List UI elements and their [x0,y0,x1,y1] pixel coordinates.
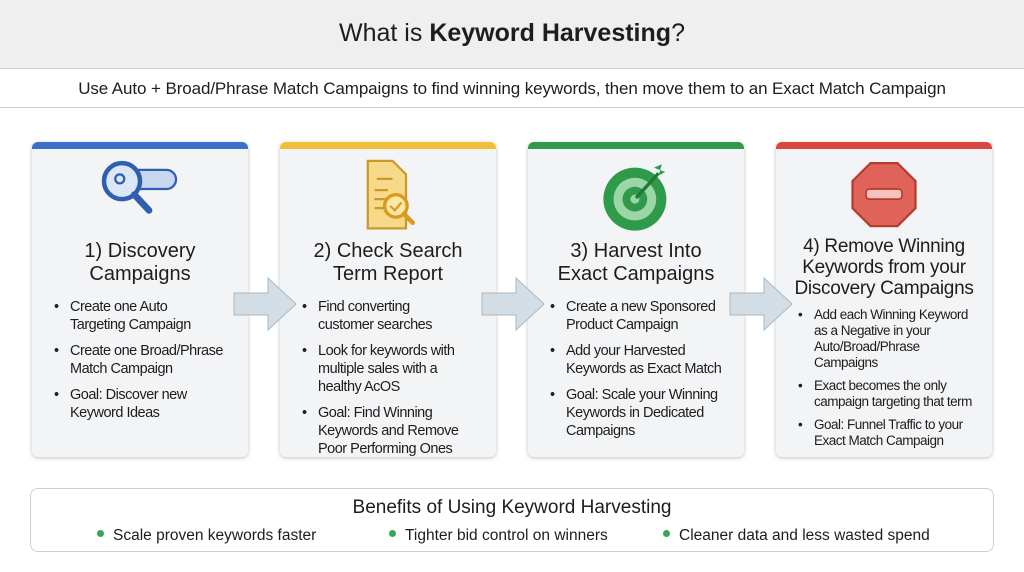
panel: discovery campaigns [32,142,248,457]
title: What is Keyword Harvesting? [339,19,685,47]
heading: Exact Campaigns [558,263,714,285]
bullets: Look for keywords with multiple sales with a healthy AcOS [318,343,454,395]
bullets: Add your Harvested Keywords as Exact Match [566,343,721,377]
arrow 1 [234,277,296,331]
heading [314,240,462,285]
heading [558,240,714,285]
heading: 3) Harvest Into [570,240,702,262]
subtitle [0,69,1024,108]
panel: search term report [280,142,496,457]
bullets: Exact becomes the only campaign targeting that term [814,378,972,409]
benefit 1: Scale proven keywords faster [113,527,316,544]
heading: Campaigns [89,263,191,285]
heading [84,240,196,285]
bullets: Create a new Sponsored Product Campaign [566,299,715,333]
panel: benefits [30,488,994,552]
bullets: Goal: Find Winning Keywords and Remove Poor Performing Ones [318,405,458,457]
heading: 4) Remove Winning [803,236,965,257]
icon: stop sign [851,162,917,228]
icon: magnifier search [102,160,178,214]
bullets: Create one Auto Targeting Campaign [70,299,191,333]
arrow 2 [482,277,544,331]
bullets: Create one Broad/Phrase Match Campaign [70,343,223,377]
heading: Discovery Campaigns [794,278,974,299]
icon: document magnifier [366,160,415,230]
bullets: Goal: Scale your Winning Keywords in Dedicated Campaigns [566,387,718,439]
bullets: Find converting customer searches [318,299,432,333]
heading: Keywords from your [802,257,966,278]
benefit 2: Tighter bid control on winners [405,527,608,544]
benefit 3: Cleaner data and less wasted spend [679,527,930,544]
heading: Term Report [333,263,443,285]
panel: harvest [528,142,744,457]
bullets: Add each Winning Keyword as a Negative in your Auto/Broad/Phrase Campaigns [814,307,968,370]
panel: remove [776,142,992,457]
bullets: Goal: Discover new Keyword Ideas [70,387,187,421]
heading: 1) Discovery [84,240,196,262]
icon: target [603,164,666,231]
heading: 2) Check Search [314,240,462,262]
arrow 3 [730,277,792,331]
heading [794,236,974,299]
bullets [54,299,223,421]
subtitle: Use Auto + Broad/Phrase Match Campaigns to find winning keywords, then move them to an Exact Match Campaign [78,79,946,98]
bullets [798,307,972,448]
bullets [302,299,458,457]
bullets [550,299,721,439]
title [0,0,1024,69]
bullets: Goal: Funnel Traffic to your Exact Match Campaign [814,417,963,448]
benefits heading: Benefits of Using Keyword Harvesting [353,497,671,518]
